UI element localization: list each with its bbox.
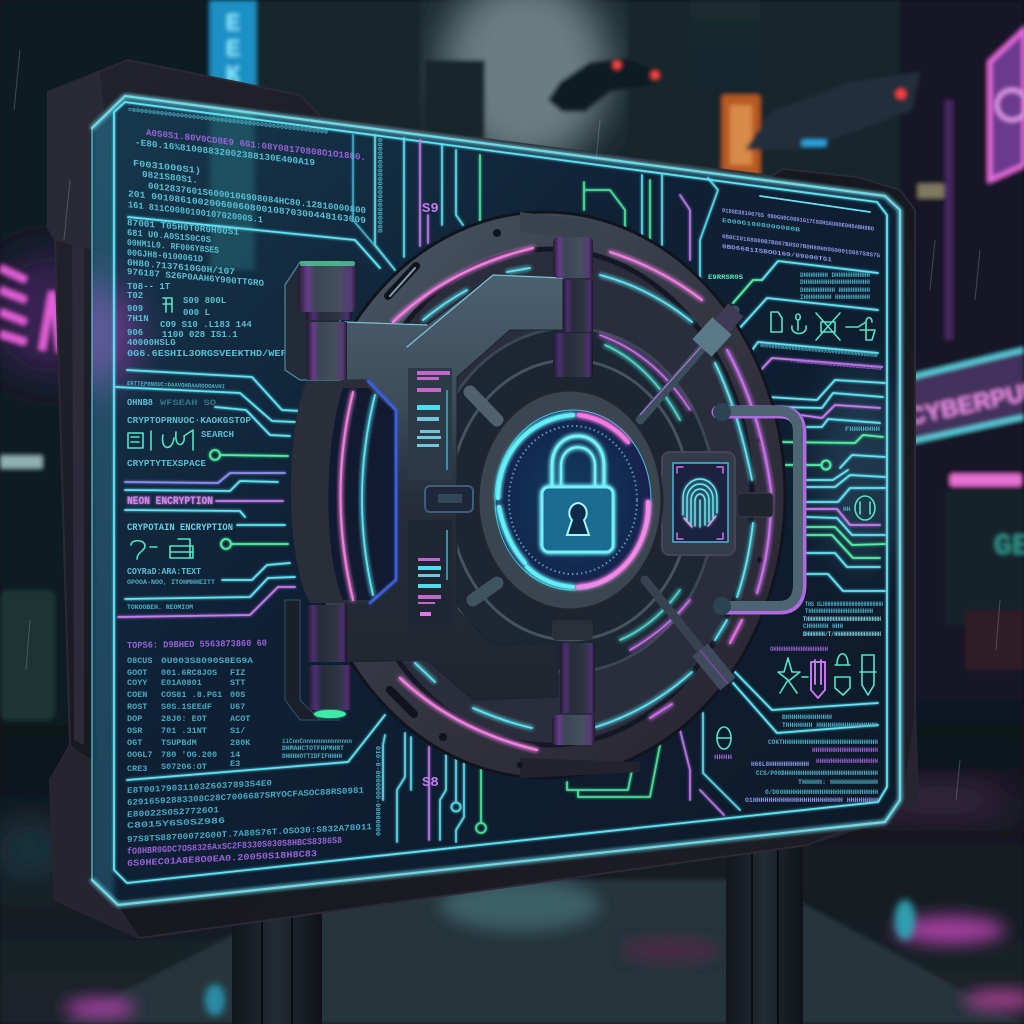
data table left: 906 bbox=[127, 328, 143, 338]
data table bottom left: ACOT bbox=[230, 714, 250, 724]
left circuit lines and labels: OHNB8 bbox=[127, 398, 153, 408]
right data block: CHHHHHH HHH bbox=[803, 623, 843, 630]
plate readout lower bbox=[408, 520, 452, 626]
data block: mid left: 87001 T05H0T0R0H00S1 bbox=[127, 217, 240, 238]
bottom segment plate bbox=[520, 758, 640, 778]
right bottom hinge bbox=[552, 620, 595, 745]
left circuit lines and labels: TOKOOBEH. REOMIOM bbox=[127, 604, 193, 611]
data table bottom left: FIZ bbox=[230, 668, 245, 678]
right data block: 0BD6681ISBOO160/09000TG1 bbox=[722, 243, 832, 264]
door plate bbox=[345, 275, 563, 700]
data block: mid left: 0H80.7137610G0H/107 bbox=[127, 257, 235, 277]
data table bottom left: O8CUS bbox=[127, 656, 153, 666]
data table bottom left: DOP bbox=[127, 714, 142, 724]
right data block: 0188E881007GS 0B0GU0C0801G17C88HS8U0DE0H8ABH8BO bbox=[722, 207, 874, 233]
data table bottom left: 0U003S8090S8EG9A bbox=[161, 656, 254, 666]
data table bottom left: OSR bbox=[127, 726, 143, 736]
data block: mid left: 976187 S26P0AAH6Y900TTGRO bbox=[127, 266, 265, 289]
corner plate bottom-left bbox=[50, 745, 140, 938]
neon sign: vertical cyan: E bbox=[226, 37, 240, 64]
data table left: C09 S10 .L183 144 bbox=[160, 320, 252, 330]
right data block: 00000000000000000000000000000000000000000 bbox=[760, 342, 878, 359]
small icons bbox=[163, 298, 172, 312]
data block: mid left: 681 U0.A0S1S0C0S bbox=[127, 227, 212, 245]
small text rows: DHHHHHHH DHHHHHHHHHH bbox=[800, 272, 870, 279]
lock icon on right bbox=[843, 496, 875, 520]
handle bar bbox=[713, 403, 800, 615]
data table bottom left: COS81 .8.PG1 bbox=[161, 690, 222, 700]
data table bottom left: S07206:OT bbox=[161, 762, 207, 772]
data block: bottom left: 97S8TS88700072G00T.7A80S76T.OSO30:S832A78011 bbox=[127, 822, 372, 845]
right data block: OHHHHHHHHHHHHHHHH bbox=[770, 646, 828, 653]
data block: top left: 201 0010861002006006080010870300448163009 bbox=[128, 188, 366, 226]
dial tick ring bbox=[509, 426, 637, 574]
data block: top left: 161 811C008010010702000S.1 bbox=[128, 199, 264, 226]
distant towers bbox=[255, 0, 940, 200]
data block: bottom left: 6S0HEC01A8E8O0EA0.20050S18H8C83 bbox=[127, 849, 317, 869]
data table bottom left: CRE3 bbox=[127, 764, 147, 774]
small icon lower right bbox=[714, 727, 732, 761]
data table left: 0G6.6ESHIL3ORGSVEEKTHD/WEFRG bbox=[127, 349, 299, 359]
right data block: HHHHHHHHHHHHHHHHHH bbox=[812, 747, 878, 754]
data table bottom left: GOOT bbox=[127, 668, 147, 678]
support posts bbox=[232, 835, 803, 1024]
data block: bottom left bbox=[127, 773, 372, 869]
trace group bbox=[733, 261, 885, 733]
data table bottom left: STT bbox=[230, 678, 245, 688]
data table left: T02 bbox=[127, 291, 143, 301]
data table bottom left: OGT bbox=[127, 738, 142, 748]
icons: question and chart glyphs bbox=[131, 539, 193, 559]
right data block: THHHHHHHHHHHHHHHHHHHHHHHH bbox=[803, 616, 881, 623]
data block: top left: 0821S80S1. bbox=[142, 169, 198, 186]
data block: top left bbox=[128, 106, 366, 237]
vertical bottom text: 010-0-0000000-00000000 bbox=[374, 746, 381, 836]
data table bottom left: 00S bbox=[230, 690, 245, 700]
right data block: DHHHHHHHHHHHHHHHHHH bbox=[800, 279, 870, 286]
left circuit lines and labels: ERTTEPRNOUC=DAAVOHRAARDOOAVHI bbox=[127, 380, 225, 390]
data table left: 1100 028 IS1.1 bbox=[162, 330, 238, 340]
billboard frame bbox=[48, 60, 918, 938]
fingerprint bbox=[683, 479, 717, 527]
data table bottom left: S1/ bbox=[230, 726, 245, 736]
right knob bbox=[737, 493, 773, 517]
glass panel bbox=[35, 96, 905, 905]
icons: disk and circuit glyphs bbox=[128, 430, 193, 450]
wet ground bbox=[0, 725, 1024, 1024]
plate highlight bbox=[345, 275, 563, 347]
padlock icon bbox=[542, 436, 613, 552]
data table left: T08-- 1T bbox=[127, 282, 171, 292]
right data block: BHHHHHHHHHHHH bbox=[782, 714, 832, 721]
data table bottom left: U67 bbox=[230, 702, 245, 712]
spoke bars bbox=[470, 310, 736, 684]
data table left: 40000HSLG bbox=[127, 338, 176, 348]
left half-moon panel bbox=[291, 380, 397, 603]
dial neon segments bbox=[498, 415, 648, 587]
left street details bbox=[0, 456, 55, 720]
small hex lines below hinge bbox=[282, 738, 352, 760]
divider line bottom left bbox=[127, 715, 385, 780]
plate readout upper bbox=[408, 368, 452, 480]
label: cryptain encryption: CRYPOTAIN ENCRYPTION bbox=[127, 523, 233, 534]
right data block: THHHHH: HHHHHHHHHHHH bbox=[798, 779, 878, 786]
inner dark chamber bbox=[425, 328, 715, 672]
right data block: BHHHHHH/T/HHHHHHHHHHHHHHH bbox=[803, 631, 881, 638]
data block: mid left: 00HM1L0. RF006Y8SES bbox=[127, 237, 220, 256]
data table bottom left: S0S.1SEEdF bbox=[161, 702, 212, 712]
left circuit lines and labels: WFSEAH SO bbox=[160, 398, 216, 408]
data block: bottom left: fO8HBR0GDC7OS8326AxSC2F8330S030S8HBCS8386S8 bbox=[127, 836, 342, 857]
neon sign: cyberpunk bbox=[906, 350, 1024, 442]
right data block: CCS/P00BHHHHHHHHHHHHHHHHHHHHHHHHHH bbox=[756, 770, 878, 777]
icons row top right bbox=[771, 312, 875, 340]
right data block: O1HHHHHHHHHHHHHHHHHHHHHHH HHHHHHHH bbox=[745, 797, 878, 804]
data block: bottom left: E8T00179031103Z6037893S4E0 bbox=[127, 778, 272, 796]
small hex lines below hinge: DHHHHOTTIDFIFHHHH bbox=[282, 753, 342, 760]
data table left: 7H1N bbox=[127, 314, 149, 324]
data block: bottom left: 62916592883308C28C7006687SRYOCFASOC88RS0981 bbox=[127, 786, 364, 808]
small hex lines below hinge: DHMAHCTOTFHPMHRT bbox=[282, 745, 344, 752]
data block: top left: F0031000S1) bbox=[133, 158, 201, 176]
left circuit lines and labels: CRYPTOPRNUOC·KAOKGSTOP bbox=[127, 416, 252, 426]
left circuit lines and labels: COYRaD:ARA:TEXT bbox=[127, 567, 202, 577]
neon arc traces on ring bbox=[393, 248, 771, 750]
right data block: COKTHHHHHHHHHHHHHHHHHHHHHHHHHH bbox=[768, 739, 878, 746]
data table bottom left: TSUPBdM bbox=[161, 738, 197, 748]
vertical right text: 0000000000000000000000 bbox=[376, 138, 383, 233]
right data block bbox=[376, 138, 885, 804]
divider line top left bbox=[128, 217, 380, 268]
corner plate top-left bbox=[48, 72, 104, 250]
left circuit lines and labels: OPOOA-NOO, ITOHMHHEITT bbox=[127, 579, 215, 586]
data block: mid left: 00GJH8-0100061D bbox=[127, 247, 204, 265]
data table bottom left: 14 bbox=[230, 750, 240, 760]
neon sign: vertical cyan bbox=[210, 0, 256, 90]
inner ring bbox=[348, 249, 752, 745]
data table bottom left: COEN bbox=[127, 690, 147, 700]
outer neon outline bbox=[92, 96, 900, 905]
left dim edge bbox=[91, 128, 93, 880]
right data block: !!8S1G1HH8S1G1S8S1S8S1G1S8S1 bbox=[790, 357, 882, 372]
right building bbox=[900, 0, 1024, 700]
right data block: E000G1008000080B bbox=[722, 217, 801, 234]
foggy sky gap bbox=[440, 0, 610, 165]
data table bottom left: 701 .31NT bbox=[161, 726, 207, 736]
right data block: FHHHHHHH bbox=[845, 426, 880, 433]
data table bottom left: 28J0: EOT bbox=[161, 714, 207, 724]
purple heading row: A0S0S1.80V0CD8E9 6G1:08Y08170808O1O1880. bbox=[146, 127, 366, 163]
data table left: S09 800L bbox=[183, 296, 226, 306]
left buildings bbox=[0, 0, 210, 760]
neon sign: orange bbox=[722, 95, 760, 177]
inner neon outline bbox=[114, 102, 887, 883]
left latch knob bbox=[425, 486, 473, 512]
top circuit glyph: S9 bbox=[422, 201, 439, 217]
flying car left bbox=[548, 58, 660, 112]
storefront bbox=[945, 474, 1024, 670]
data table bottom left: TOPS6: D9BHED 5563873860 60 bbox=[127, 639, 267, 651]
right data block: THHHHHHHHHHHHHHHHHHH bbox=[805, 608, 873, 615]
lock icon on right: HH bbox=[843, 506, 851, 513]
ring slots and bolts bbox=[388, 229, 763, 768]
right data block: DHHHHHHHHH HHHHHHHHH bbox=[800, 287, 870, 294]
small icon lower right: HHHH bbox=[714, 754, 732, 761]
fingerprint reader bbox=[662, 452, 735, 555]
data block: top left: =0000000000000000000000000000000000000000000000000 bbox=[128, 106, 328, 136]
right data block: HHHHHHHHHHHHHHHHH bbox=[816, 758, 878, 765]
data block: bottom left: C8015Y6S0SZ986 bbox=[127, 816, 225, 831]
data table left bbox=[127, 282, 299, 359]
data block: bottom left: E80022S0S27726O1 bbox=[127, 805, 219, 820]
data table bottom left: 780 'OG.200 bbox=[161, 750, 217, 760]
icons row bottom right bbox=[778, 654, 876, 698]
data table bottom left: E3 bbox=[230, 759, 240, 769]
flying car right bbox=[745, 72, 920, 150]
label: neon encryption: NEON ENCRYPTION bbox=[127, 496, 213, 508]
right data block: IHHHHHHHH HHHHHHHHHH bbox=[800, 294, 870, 301]
right data block: E9RRSR0S bbox=[708, 274, 743, 281]
data table bottom left: COYY bbox=[127, 678, 148, 688]
data block: mid left bbox=[127, 217, 265, 289]
top circuit traces bbox=[353, 135, 718, 280]
data block: top left: 0012837601S6000106908084HC80.12810000800 bbox=[148, 180, 366, 216]
lock dial face bbox=[495, 410, 651, 590]
neon sign: vertical cyan: K bbox=[226, 63, 241, 90]
right top hinge bbox=[553, 237, 593, 377]
right data block: THHHHHHH HHHHHHHHHHHHHHHH bbox=[782, 722, 877, 729]
data table left: 000 L bbox=[183, 308, 210, 318]
data table bottom left: E01A0801 bbox=[161, 678, 202, 688]
rain streaks bbox=[14, 50, 1000, 800]
data table bottom left: 001.6RC8JOS bbox=[161, 668, 217, 678]
top segment plate bbox=[520, 212, 600, 240]
right data block: O/D00HHHHHHHHHHHHHHHHHHHHHHHHHH bbox=[765, 789, 878, 796]
left bottom hinge bbox=[285, 600, 352, 720]
inner chamber arcs bbox=[605, 345, 680, 420]
bottom circuit glyph: S8 bbox=[422, 775, 439, 791]
left circuit lines and labels: SEARCH bbox=[201, 430, 234, 440]
data table bottom left: 280K bbox=[230, 738, 251, 748]
data table left: 909 bbox=[127, 304, 143, 314]
data table bottom left bbox=[127, 639, 267, 774]
data block: top left: -E80.16%81008832002388130E400A19 bbox=[135, 137, 315, 168]
vault bbox=[285, 212, 800, 778]
lock dial housing bbox=[478, 390, 662, 610]
data table bottom left: OOGL7 bbox=[127, 750, 153, 760]
bottom circuit traces bbox=[383, 713, 740, 842]
outer ring bbox=[305, 212, 785, 778]
windows bbox=[918, 184, 944, 198]
right data block: THS GLHHHHHHHHHHHHHHHHHHHH bbox=[805, 601, 883, 608]
left circuit lines and labels: CRYPTYTEXSPACE bbox=[127, 459, 207, 469]
small hex lines below hinge: iiCnnCnnnnnnnnnnnnnn bbox=[282, 738, 352, 745]
circuit traces bbox=[116, 370, 300, 617]
left column highlight bbox=[72, 245, 84, 745]
right bracket bbox=[808, 712, 918, 845]
left top hinge bbox=[285, 261, 357, 380]
right data block: H66L8HHHHHHHHHHH bbox=[751, 761, 809, 768]
left circuit lines and labels bbox=[116, 370, 300, 617]
neon sign: purple bbox=[990, 30, 1024, 180]
data table bottom left: ROST bbox=[127, 702, 147, 712]
glass background glow bbox=[35, 100, 905, 900]
neon sign: vertical cyan: E bbox=[226, 11, 240, 38]
neon sign: left pink bbox=[0, 255, 110, 375]
right data block: 0B0CI0188800B7B807B0S07B0H80H80S0001S687S8S7G bbox=[722, 233, 880, 259]
